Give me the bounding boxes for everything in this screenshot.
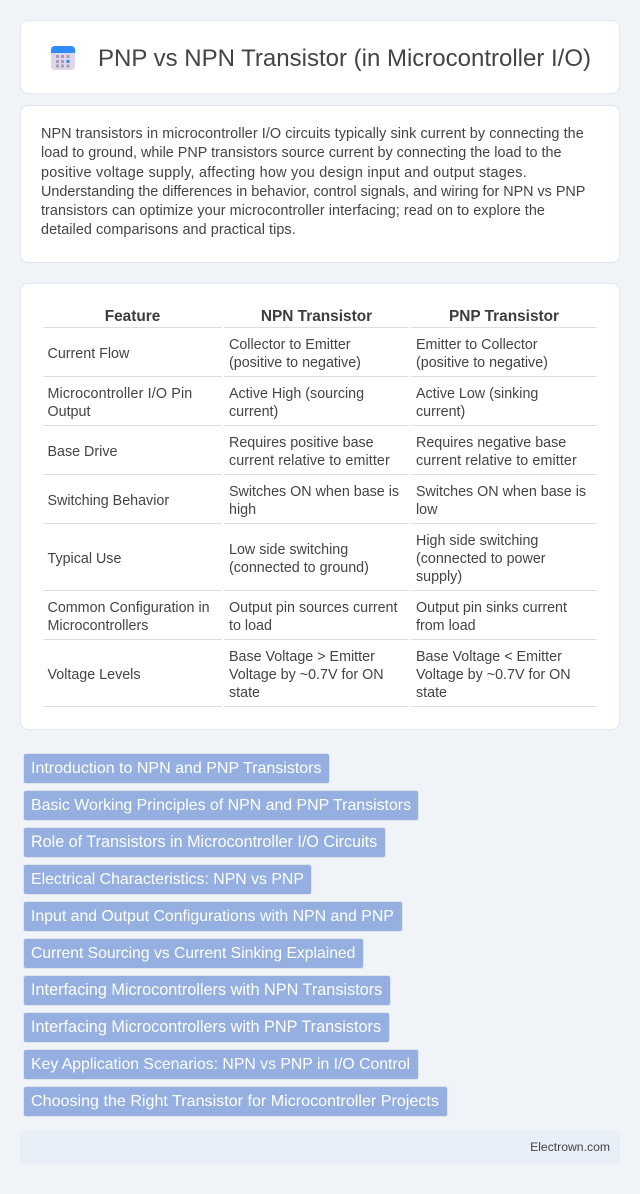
table: Microcontrollers: [48, 618, 148, 634]
table: Switches ON when base is: [416, 484, 586, 500]
table: PNP Transistor: [449, 308, 559, 325]
table: Output: [48, 404, 90, 420]
topic: input and output: [23, 901, 403, 932]
intro text: transistors can optimize your microcontroller interfacing; read on to explore the: [41, 203, 545, 219]
table: Feature: [105, 308, 160, 325]
table: High side switching: [416, 533, 538, 549]
intro text: load to ground, while PNP transistors source current by connecting the load to the: [41, 145, 562, 161]
topic: application scenarios: [23, 1049, 419, 1080]
table: state: [416, 685, 447, 701]
intro text: detailed comparisons and practical tips.: [41, 222, 296, 238]
table: state: [229, 685, 260, 701]
table: Active Low (sinking: [416, 386, 538, 402]
table: Voltage by ~0.7V for ON: [229, 667, 384, 683]
table: Collector to Emitter: [229, 337, 351, 353]
table: current): [416, 404, 465, 420]
topic: electrical characteristics: Electrical Characteristics: NPN vs PNP: [31, 871, 304, 888]
table: Voltage by ~0.7V for ON: [416, 667, 571, 683]
table: Switches ON when base is: [229, 484, 399, 500]
table: (connected to ground): [229, 560, 369, 576]
table: Requires negative base: [416, 435, 566, 451]
footer: [20, 1130, 620, 1164]
comparison table panel: [20, 283, 620, 730]
table: (positive to negative): [229, 355, 361, 371]
topic: choosing transistor: Choosing the Right Transistor for Microcontroller Projects: [31, 1092, 439, 1110]
topic: role of transistors: [23, 827, 386, 858]
topic: role of transistors: Role of Transistors in Microcontroller I/O Circuits: [31, 833, 377, 851]
table: current relative to emitter: [416, 453, 577, 469]
topic: choosing transistor: [23, 1086, 448, 1117]
intro text: Understanding the differences in behavior, control signals, and wiring for NPN vs PNP: [41, 184, 585, 200]
table: Switching Behavior: [48, 493, 169, 509]
topic: interfacing PNP: [23, 1012, 390, 1043]
intro text: positive voltage supply, affecting how you design input and output stages.: [41, 165, 527, 181]
topic button list: [23, 753, 448, 1117]
intro panel: [20, 105, 620, 263]
table: to load: [229, 618, 272, 634]
topic: working principles: [23, 790, 419, 821]
icon: calendar grid: [51, 46, 75, 70]
table: (positive to negative): [416, 355, 548, 371]
table: Emitter to Collector: [416, 337, 538, 353]
header panel: [20, 20, 620, 94]
table: Low side switching: [229, 542, 348, 558]
table: Output pin sinks current: [416, 600, 567, 616]
topic: input and output: Input and Output Configurations with NPN and PNP: [31, 908, 394, 925]
table: Requires positive base: [229, 435, 374, 451]
topic: interfacing PNP: Interfacing Microcontrollers with PNP Transistors: [31, 1018, 381, 1036]
table: Common Configuration in: [48, 600, 210, 616]
topic: working principles: Basic Working Principles of NPN and PNP Transistors: [31, 797, 411, 814]
table: Active High (sourcing: [229, 386, 364, 402]
table: from load: [416, 618, 476, 634]
table: Base Voltage < Emitter: [416, 649, 562, 665]
table: supply): [416, 569, 462, 585]
table: NPN Transistor: [261, 308, 372, 325]
table: Typical Use: [48, 551, 121, 567]
topic: electrical characteristics: [23, 864, 312, 895]
title: PNP vs NPN Transistor (in Microcontroller I/O): [98, 45, 591, 72]
topic: application scenarios: Key Application Scenarios: NPN vs PNP in I/O Control: [31, 1056, 410, 1073]
table: Base Voltage > Emitter: [229, 649, 375, 665]
table: Voltage Levels: [48, 667, 140, 683]
topic: sourcing vs sinking: Current Sourcing vs Current Sinking Explained: [31, 945, 355, 962]
table: (connected to power: [416, 551, 546, 567]
table: low: [416, 502, 437, 518]
table: current): [229, 404, 278, 420]
table: current relative to emitter: [229, 453, 390, 469]
table: [43, 308, 597, 707]
footer credit: Electrown.com: [530, 1140, 610, 1154]
topic: sourcing vs sinking: [23, 938, 364, 969]
table: Base Drive: [48, 444, 117, 460]
table: Output pin sources current: [229, 600, 397, 616]
topic: introduction: Introduction to NPN and PNP Transistors: [31, 760, 322, 777]
table: high: [229, 502, 256, 518]
intro text: [41, 126, 585, 238]
topic: interfacing NPN: [23, 975, 391, 1006]
table: Current Flow: [48, 346, 129, 362]
topic: interfacing NPN: Interfacing Microcontrollers with NPN Transistors: [31, 981, 382, 999]
table: Microcontroller I/O Pin: [48, 386, 192, 402]
topic: introduction: [23, 753, 330, 784]
intro text: NPN transistors in microcontroller I/O circuits typically sink current by connecting the: [41, 126, 584, 142]
